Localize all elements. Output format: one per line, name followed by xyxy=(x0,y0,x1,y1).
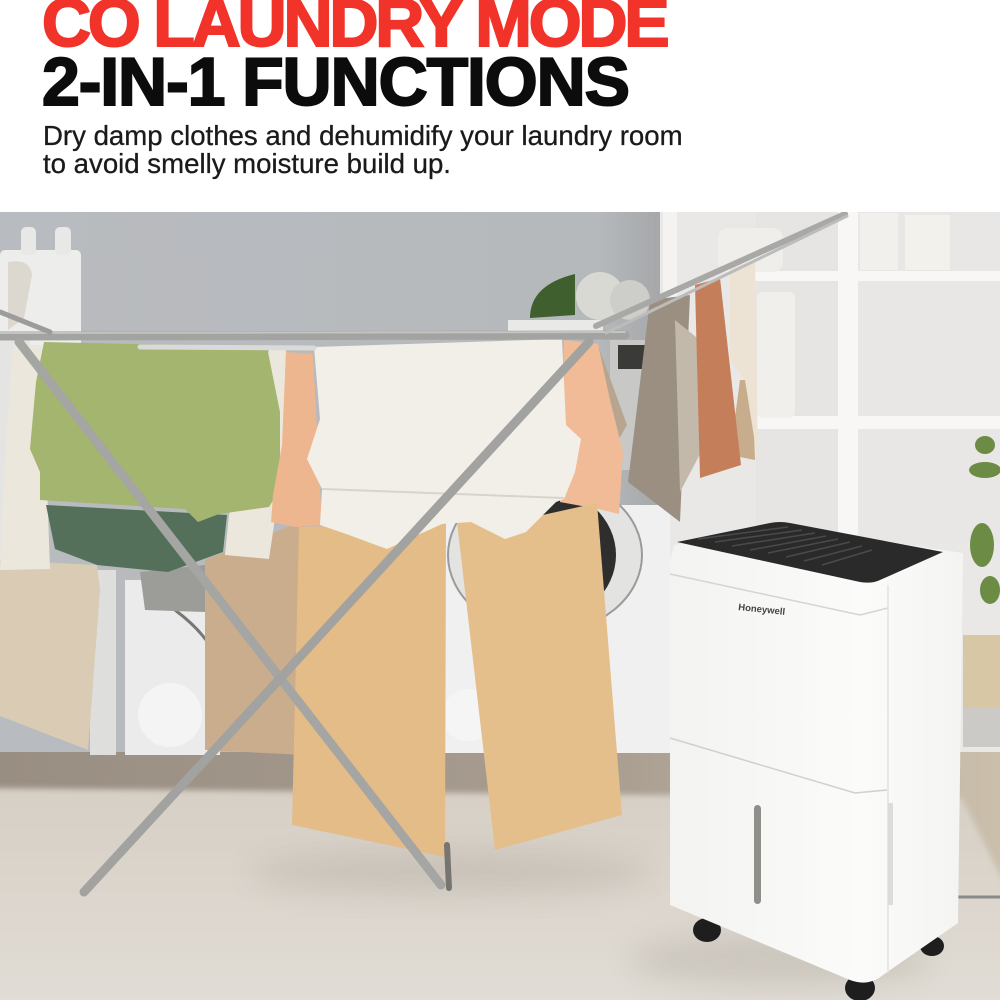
brand: Honeywell xyxy=(738,602,786,618)
hanging cloth: white ribbed sleeve xyxy=(225,350,286,559)
title: 2-in-1 functions: 2-IN-1 FUNCTIONS xyxy=(42,44,629,120)
power cord xyxy=(958,896,1000,898)
shelving unit xyxy=(660,212,1000,762)
rug xyxy=(0,788,1000,1000)
photo: laundry room scene xyxy=(0,212,1000,1000)
hanging cloth: white sleeve left xyxy=(0,345,50,570)
hanging cloth: tan pants back xyxy=(205,520,305,755)
hanging cloth: grey garment xyxy=(140,565,205,612)
floor xyxy=(0,752,1000,1000)
wall xyxy=(0,212,665,762)
hanging cloth: white shirt xyxy=(307,339,581,549)
plant on shelf xyxy=(508,272,650,470)
hanging cloth: khaki trousers xyxy=(292,503,622,857)
hanging cloth: green shirt xyxy=(30,342,280,522)
hanging cloth: peach shirt right xyxy=(560,340,623,514)
shelf clothes xyxy=(628,262,758,522)
hanging cloth: dark green shirt xyxy=(46,505,227,572)
detergent bottle xyxy=(0,227,81,350)
drying rack xyxy=(0,214,847,892)
hanging cloth: beige pants left xyxy=(0,560,100,750)
dehumidifier xyxy=(670,522,963,1000)
seam lines xyxy=(670,574,888,615)
description text: to avoid smelly moisture build up. xyxy=(43,148,451,179)
water level window xyxy=(754,805,761,904)
body xyxy=(670,525,963,983)
washing machines xyxy=(0,340,670,755)
soft floor shadows xyxy=(250,850,930,986)
hanging cloth: peach shirt left xyxy=(271,352,322,527)
top panel with grille xyxy=(677,522,943,583)
plant right xyxy=(969,436,1000,604)
description text xyxy=(43,120,683,180)
description text: Dry damp clothes and dehumidify your laundry room xyxy=(43,120,683,151)
wooden box xyxy=(963,635,1000,747)
wheels xyxy=(693,918,944,1000)
hanging cloth: tan piece xyxy=(598,345,627,439)
